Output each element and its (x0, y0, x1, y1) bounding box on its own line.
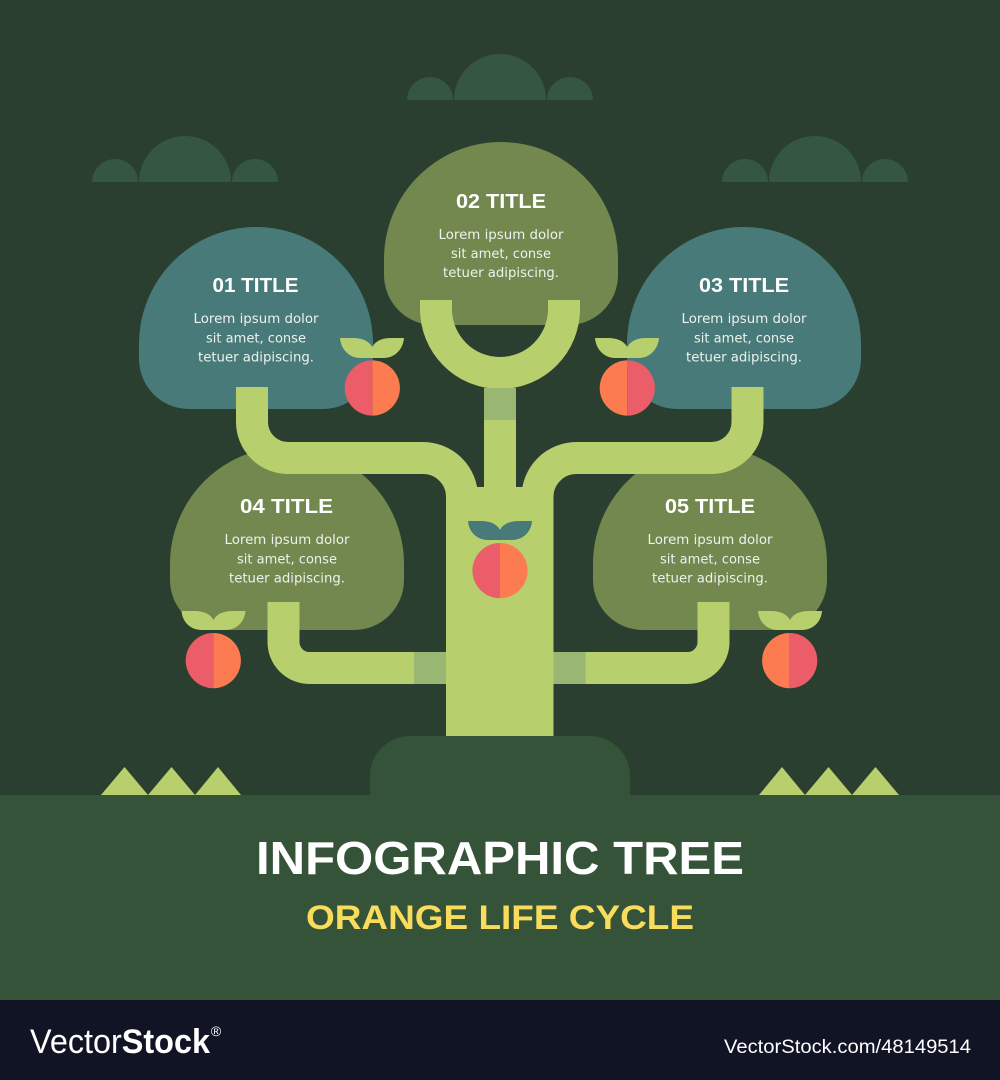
text block: 01: tetuer adipiscing. (198, 350, 314, 366)
text block: 05: sit amet, conse (660, 552, 760, 568)
cloud: left (92, 136, 278, 182)
branch highlight left (414, 652, 446, 684)
grass: left (101, 767, 241, 795)
subtitle: ORANGE LIFE CYCLE (306, 899, 694, 937)
text block: 05: 05 TITLE (665, 495, 755, 518)
panel: 02 canopy (384, 142, 618, 325)
text block: 03: 03 TITLE (699, 274, 789, 297)
branch 03 (538, 387, 748, 510)
central stem (484, 388, 516, 490)
text block: 03: tetuer adipiscing. (686, 350, 802, 366)
title: INFOGRAPHIC TREE (256, 832, 744, 884)
stem highlight (484, 388, 516, 420)
text block: 05: tetuer adipiscing. (652, 572, 768, 586)
text block: 01: sit amet, conse (206, 332, 306, 346)
branch 01 (252, 387, 462, 510)
cloud: right (722, 136, 908, 182)
text block: 03 (682, 274, 807, 366)
tree mound (370, 736, 630, 795)
fruit: centre (468, 521, 532, 598)
branch 04 (284, 602, 450, 668)
tree trunk and branches (252, 300, 748, 736)
fruit: 05 (758, 611, 822, 688)
footer url: VectorStock.com/48149514 (724, 1037, 971, 1058)
text block: 05: Lorem ipsum dolor (648, 533, 773, 548)
text block: 04: tetuer adipiscing. (229, 572, 345, 586)
text block: 05 (648, 495, 773, 586)
branch 05 (550, 602, 714, 668)
text block: 02: Lorem ipsum dolor (438, 228, 564, 243)
footer registered mark: ® (211, 1023, 222, 1039)
panel: 01 canopy (139, 227, 373, 409)
ground (0, 795, 1000, 1000)
fruit: 01 (340, 338, 404, 416)
text block: 02: tetuer adipiscing. (443, 266, 559, 281)
text block: 04: Lorem ipsum dolor (224, 533, 350, 548)
text block: 03: sit amet, conse (694, 332, 794, 346)
text block: 04: sit amet, conse (237, 552, 337, 568)
footer logo: VectorStock (30, 1023, 210, 1061)
top fork (436, 300, 564, 373)
text block: 01 (194, 274, 319, 366)
fruit: 04 (182, 611, 246, 688)
text block: 02: 02 TITLE (456, 190, 546, 213)
cloud: top (407, 54, 593, 100)
panel: 03 canopy (627, 227, 861, 409)
branch highlight right (554, 652, 586, 684)
text block: 02 (438, 190, 564, 281)
trunk (446, 487, 554, 736)
text block: 03: Lorem ipsum dolor (682, 312, 807, 327)
text block: 01: Lorem ipsum dolor (194, 312, 319, 327)
text block: 04 (224, 495, 350, 586)
text block: 04: 04 TITLE (240, 495, 333, 518)
fruit: 03 (595, 338, 659, 416)
text block: 02: sit amet, conse (451, 247, 551, 262)
text block: 01: 01 TITLE (212, 274, 298, 297)
footer bar (0, 1000, 1000, 1080)
panel: 04 canopy (170, 447, 404, 630)
grass: right (759, 767, 899, 795)
panel: 05 canopy (593, 447, 827, 630)
